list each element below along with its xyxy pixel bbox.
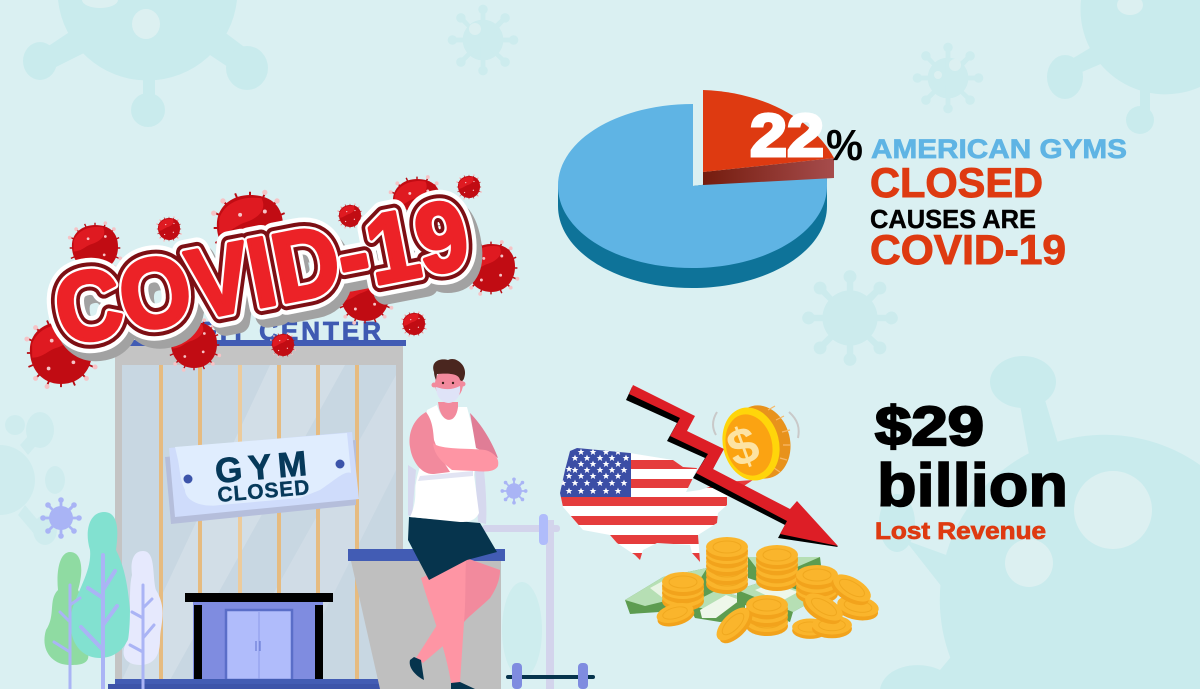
stat: lost revenue: $29 xyxy=(875,395,984,457)
barbell and counter xyxy=(348,514,595,689)
stat: 22% xyxy=(750,102,863,170)
trees xyxy=(44,512,163,689)
text block: American gyms closed: COVID-19 xyxy=(870,226,1066,273)
icon: gold coin xyxy=(713,399,799,487)
shirt xyxy=(408,465,486,524)
arrow: revenue falling xyxy=(626,385,838,547)
stat: 22%: 22 xyxy=(750,102,824,169)
person with mask xyxy=(408,359,500,689)
head xyxy=(435,368,463,400)
stat: 22%: % xyxy=(826,121,863,170)
red virus cluster xyxy=(24,174,519,389)
text block: American gyms closed: CLOSED xyxy=(870,159,1043,206)
building: gym: FIT CENTER xyxy=(201,316,381,346)
text block: American gyms closed: AMERICAN GYMS xyxy=(871,134,1127,164)
sign: gym closed: GYM xyxy=(213,444,309,491)
stat: lost revenue: Lost Revenue xyxy=(875,518,1046,545)
building: gym xyxy=(108,316,406,689)
title: COVID-19: COVID-19 xyxy=(46,178,477,366)
title: COVID-19: COVID-19 xyxy=(46,178,477,366)
title: COVID-19: COVID-19 xyxy=(46,178,477,366)
sign: gym closed: CLOSED xyxy=(217,476,310,507)
icon: small virus left xyxy=(40,497,82,539)
icon: small virus right xyxy=(500,477,528,505)
stat: lost revenue: billion xyxy=(877,452,1068,519)
neck xyxy=(438,402,458,420)
sign: gym closed xyxy=(165,432,359,524)
arms xyxy=(410,412,450,474)
door xyxy=(185,593,333,680)
cash and coin pile xyxy=(625,537,880,649)
text block: American gyms closed: CAUSES ARE xyxy=(870,204,1036,234)
stat: lost revenue xyxy=(875,395,1068,545)
icon: small virus over building xyxy=(270,332,296,358)
pie chart: 22 percent xyxy=(558,90,834,288)
shorts xyxy=(408,517,497,580)
front leg xyxy=(421,558,500,683)
USA flag map xyxy=(560,448,752,562)
title: COVID-19: COVID-19 xyxy=(46,178,477,366)
text block: American gyms closed xyxy=(870,134,1127,273)
icon: gold coin: $ xyxy=(720,415,767,479)
back leg xyxy=(416,625,450,663)
title: COVID-19: COVID-19 xyxy=(51,186,483,374)
